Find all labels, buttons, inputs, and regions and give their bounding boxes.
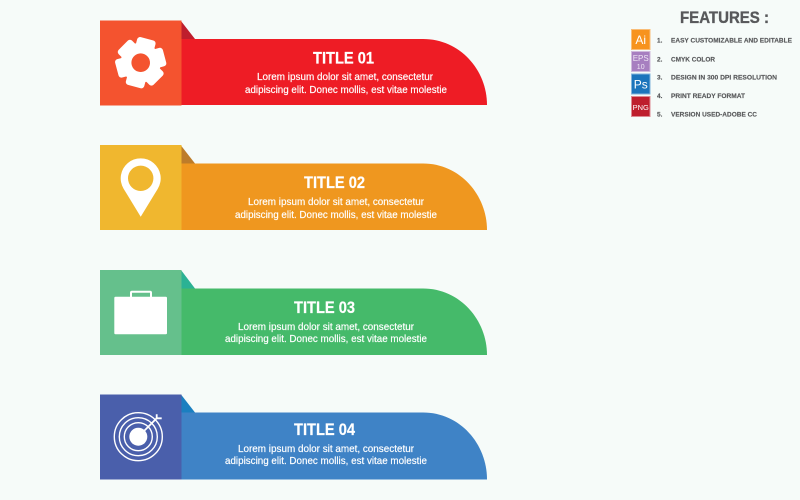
icon: Ps	[632, 74, 650, 94]
text block: description 03: Lorem ipsum dolor sit amet, consectetur	[238, 321, 414, 333]
panel: title 03	[100, 270, 487, 355]
icon: gear	[109, 32, 172, 93]
heading: title 03: TITLE 03	[294, 299, 355, 317]
blue banner	[181, 412, 487, 480]
orange banner	[181, 164, 487, 230]
indigo icon square	[100, 394, 182, 480]
text block: description 02: Lorem ipsum dolor sit amet, consectetur	[248, 196, 424, 208]
feature list: PRINT READY FORMAT	[671, 93, 745, 100]
fold triangle	[181, 270, 195, 288]
feature list: CMYK COLOR	[671, 56, 715, 64]
yellow icon square	[100, 145, 182, 230]
feature list: EASY CUSTOMIZABLE AND EDITABLE	[671, 38, 793, 44]
text block: description 03: adipiscing elit. Donec mollis, est vitae molestie	[225, 333, 427, 345]
text block: description 01: Lorem ipsum dolor sit amet, consectetur	[257, 71, 433, 83]
icon: briefcase	[114, 292, 167, 334]
fold triangle	[181, 394, 195, 412]
panel: title 01	[100, 20, 487, 106]
text block: description 01	[245, 71, 447, 96]
panel: features	[632, 9, 793, 118]
orange icon square	[100, 20, 182, 106]
light green icon square	[100, 270, 182, 355]
feature list: VERSION USED-ADOBE CC	[671, 112, 757, 118]
text block: description 04: adipiscing elit. Donec mollis, est vitae molestie	[225, 455, 427, 467]
fold triangle	[181, 21, 195, 39]
icon: EPS 10	[632, 52, 650, 72]
heading: title 02: TITLE 02	[304, 174, 365, 192]
feature list: DESIGN IN 300 DPI RESOLUTION	[671, 74, 777, 82]
text block: description 01: adipiscing elit. Donec mollis, est vitae molestie	[245, 84, 447, 96]
icon: EPS 10: EPS	[633, 54, 649, 63]
text block: description 04	[225, 443, 427, 467]
panel: title 02	[100, 145, 487, 230]
icon: Ai	[632, 30, 650, 50]
text block: description 04: Lorem ipsum dolor sit amet, consectetur	[238, 443, 414, 455]
feature list: 4.	[657, 93, 663, 100]
icon: Ai: Ai	[635, 33, 646, 47]
icon: target with arrow	[114, 413, 162, 461]
feature list: 5.	[657, 112, 663, 118]
icon: PNG	[632, 96, 650, 116]
red banner	[181, 39, 487, 105]
icon: location pin	[121, 158, 161, 217]
heading: features: FEATURES :	[680, 9, 769, 27]
icon: PNG: PNG	[633, 103, 649, 112]
icon: Ps: Ps	[634, 78, 648, 92]
text block: description 03	[225, 321, 427, 345]
feature list: 1.	[657, 38, 663, 44]
text block: description 02: adipiscing elit. Donec mollis, est vitae molestie	[235, 209, 437, 221]
heading: title 01: TITLE 01	[313, 50, 374, 68]
green banner	[181, 288, 487, 355]
heading: title 04: TITLE 04	[294, 421, 356, 439]
feature list	[657, 38, 793, 118]
feature list: 2.	[657, 56, 663, 64]
fold triangle	[181, 146, 195, 164]
panel: title 04	[100, 394, 487, 480]
text block: description 02	[235, 196, 437, 221]
feature list: 3.	[657, 74, 663, 82]
icon: EPS 10: 10	[637, 64, 645, 71]
